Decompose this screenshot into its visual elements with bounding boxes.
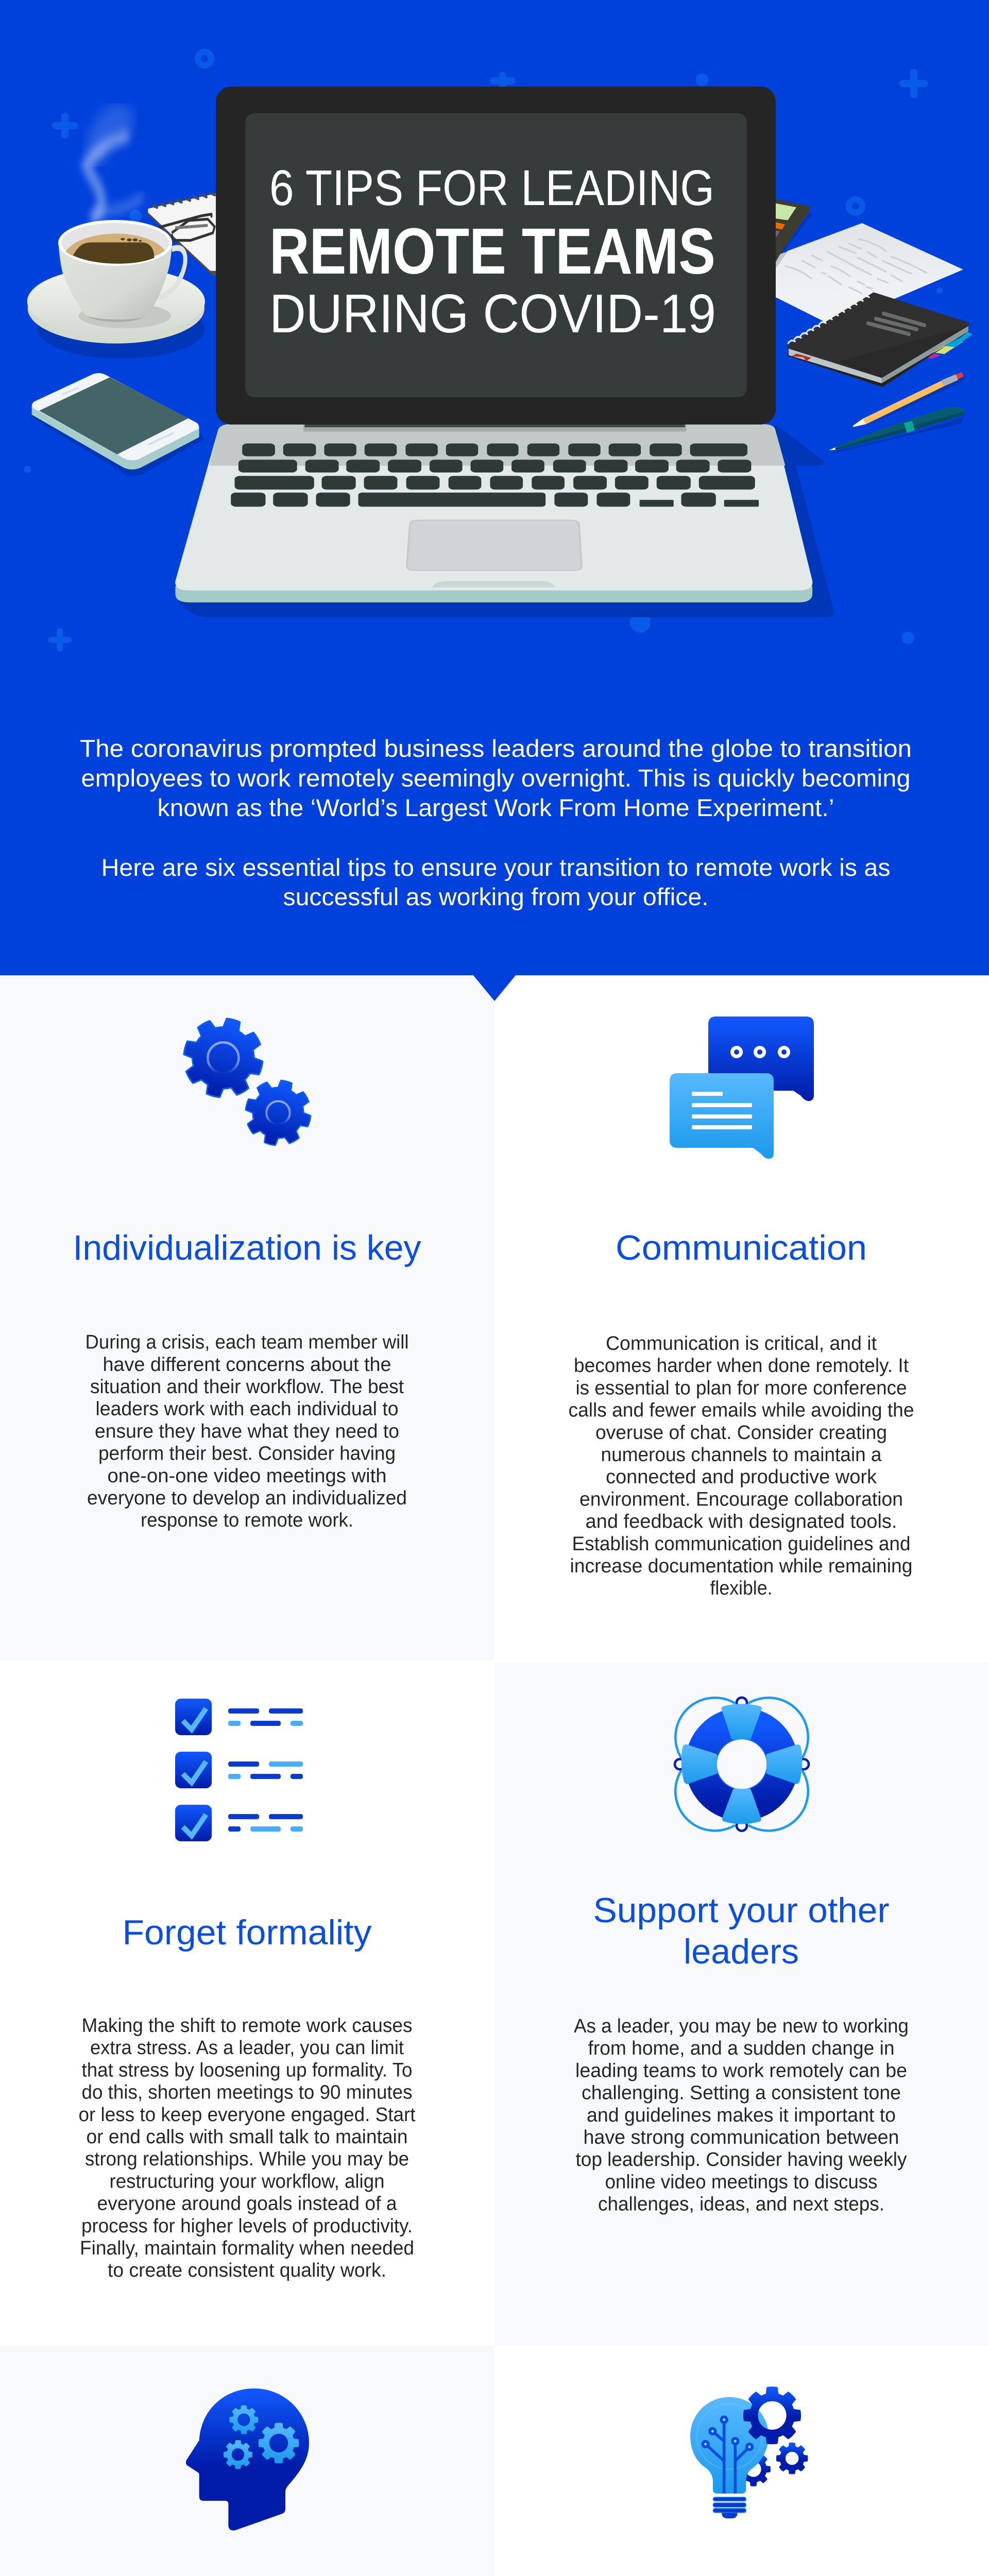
text block: forget formality: Making the shift to remote work causes bbox=[81, 2015, 412, 2037]
intro text: The coronavirus prompted business leaders around the globe to transition bbox=[80, 735, 912, 762]
icon: laptop bbox=[175, 87, 834, 617]
text block: individualization: leaders work with each individual to bbox=[96, 1398, 399, 1420]
icon: lifebuoy bbox=[675, 1698, 809, 1831]
panel: support your other leaders bbox=[494, 1663, 989, 2346]
background decorations bbox=[24, 49, 943, 652]
title bbox=[269, 160, 716, 344]
text block: forget formality: extra stress. As a leader, you can limit bbox=[90, 2037, 404, 2059]
icon: coffee cup and saucer bbox=[27, 220, 205, 359]
panel: encourage social interaction bbox=[0, 2346, 494, 2576]
text block: individualization: situation and their workflow. The best bbox=[90, 1376, 404, 1398]
text block: forget formality bbox=[78, 2015, 416, 2281]
intro text: successful as working from your office. bbox=[283, 883, 709, 910]
text block: support your other leaders: leading teams to work remotely can be bbox=[575, 2060, 907, 2081]
intro text: Here are six essential tips to ensure your transition to remote work is as bbox=[101, 854, 890, 881]
text block: forget formality: restructuring your workflow, align bbox=[109, 2171, 384, 2192]
icon: coffee steam bbox=[86, 119, 141, 218]
icon: head with gears bbox=[186, 2388, 309, 2531]
text block: individualization: perform their best. Consider having bbox=[98, 1443, 396, 1465]
intro text: known as the ‘World’s Largest Work From Home Experiment.’ bbox=[158, 794, 834, 821]
text block: communication: numerous channels to maintain a bbox=[601, 1444, 882, 1466]
title: 6 TIPS FOR LEADING bbox=[269, 160, 714, 216]
laptop keyboard keys bbox=[231, 444, 759, 506]
icon: spiral notebook bbox=[786, 292, 973, 387]
text block: communication: connected and productive work bbox=[606, 1466, 877, 1488]
text block: support your other leaders: from home, and a sudden change in bbox=[588, 2038, 894, 2059]
text block: forget formality: that stress by loosening up formality. To bbox=[81, 2059, 412, 2081]
text block: communication: flexible. bbox=[710, 1578, 773, 1599]
text block: support your other leaders: top leadership. Consider having weekly bbox=[576, 2149, 907, 2171]
text block: support your other leaders: As a leader, you may be new to working bbox=[574, 2015, 909, 2037]
heading: support your other leaders: Support your other bbox=[593, 1891, 889, 1930]
text block: forget formality: process for higher levels of productivity. bbox=[81, 2215, 413, 2237]
text block: individualization: response to remote work. bbox=[141, 1510, 353, 1531]
text block: individualization: everyone to develop an individualized bbox=[87, 1487, 407, 1509]
text block: communication: is essential to plan for more conference bbox=[576, 1377, 907, 1399]
text block: forget formality: or end calls with small talk to maintain bbox=[87, 2126, 408, 2148]
text block: support your other leaders: online video meetings to discuss bbox=[605, 2171, 878, 2193]
text block: support your other leaders: challenging. Setting a consistent tone bbox=[582, 2082, 901, 2104]
text block: forget formality: Finally, maintain formality when needed bbox=[80, 2238, 414, 2259]
text block: individualization: have different concerns about the bbox=[103, 1354, 391, 1376]
icon: notepad and glasses bbox=[146, 193, 216, 276]
panel: communication bbox=[494, 975, 989, 1663]
icon: calculator bbox=[776, 199, 812, 261]
text block: communication: Communication is critical, and it bbox=[606, 1333, 877, 1354]
text block: communication: environment. Encourage collaboration bbox=[579, 1488, 903, 1510]
heading: support your other leaders bbox=[593, 1891, 889, 1971]
icon: handwritten paper bbox=[776, 223, 963, 328]
text block: individualization: one-on-one video meetings with bbox=[107, 1465, 386, 1487]
icon: pen bbox=[828, 407, 964, 455]
text block: communication bbox=[569, 1333, 914, 1599]
text block: forget formality: strong relationships. While you may be bbox=[85, 2148, 409, 2170]
panel: hero background bbox=[0, 0, 989, 975]
text block: communication: and feedback with designated tools. bbox=[585, 1511, 897, 1533]
text block: communication: increase documentation while remaining bbox=[570, 1555, 913, 1577]
icon: smartphone bbox=[30, 373, 204, 477]
icon: lightbulb with gears bbox=[690, 2387, 808, 2518]
text block: communication: calls and fewer emails while avoiding the bbox=[569, 1400, 914, 1421]
text block: forget formality: do this, shorten meetings to 90 minutes bbox=[81, 2082, 412, 2104]
heading: individualization: Individualization is key bbox=[73, 1228, 421, 1267]
text block: individualization bbox=[86, 1332, 409, 1531]
heading: forget formality: Forget formality bbox=[123, 1913, 372, 1952]
intro text bbox=[80, 735, 912, 910]
text block: forget formality: everyone around goals instead of a bbox=[97, 2193, 397, 2215]
panel: forget formality bbox=[0, 1660, 494, 2346]
text block: support your other leaders: challenges, ideas, and next steps. bbox=[598, 2194, 884, 2215]
text block: individualization: ensure they have what they need to bbox=[95, 1420, 399, 1442]
text block: forget formality: to create consistent quality work. bbox=[108, 2260, 386, 2281]
text block: forget formality: or less to keep everyone engaged. Start bbox=[78, 2104, 416, 2126]
laptop screen bbox=[216, 87, 776, 425]
text block: support your other leaders: and guidelines makes it important to bbox=[587, 2105, 896, 2126]
title: DURING COVID-19 bbox=[269, 283, 716, 344]
heading: communication: Communication bbox=[616, 1228, 867, 1267]
icon: chat bubbles bbox=[670, 1016, 814, 1159]
icon: two gears bbox=[175, 1009, 318, 1153]
icon: checklist bbox=[175, 1699, 303, 1841]
text block: communication: becomes harder when done remotely. It bbox=[574, 1355, 909, 1377]
text block: communication: Establish communication guidelines and bbox=[572, 1533, 911, 1555]
text block: support your other leaders bbox=[574, 2015, 909, 2215]
text block: individualization: During a crisis, each team member will bbox=[86, 1332, 409, 1353]
title: REMOTE TEAMS bbox=[269, 215, 715, 287]
panel: individualization bbox=[0, 975, 494, 1660]
text block: communication: overuse of chat. Consider creating bbox=[595, 1422, 887, 1444]
intro text: employees to work remotely seemingly overnight. This is quickly becoming bbox=[81, 765, 911, 791]
text block: support your other leaders: have strong communication between bbox=[583, 2127, 899, 2148]
arrow: pointer from intro bbox=[473, 975, 516, 1001]
icon: pencil bbox=[850, 372, 967, 428]
heading: support your other leaders: leaders bbox=[684, 1932, 799, 1971]
panel: set clear expectations early bbox=[494, 2346, 989, 2576]
laptop base bbox=[175, 424, 834, 617]
